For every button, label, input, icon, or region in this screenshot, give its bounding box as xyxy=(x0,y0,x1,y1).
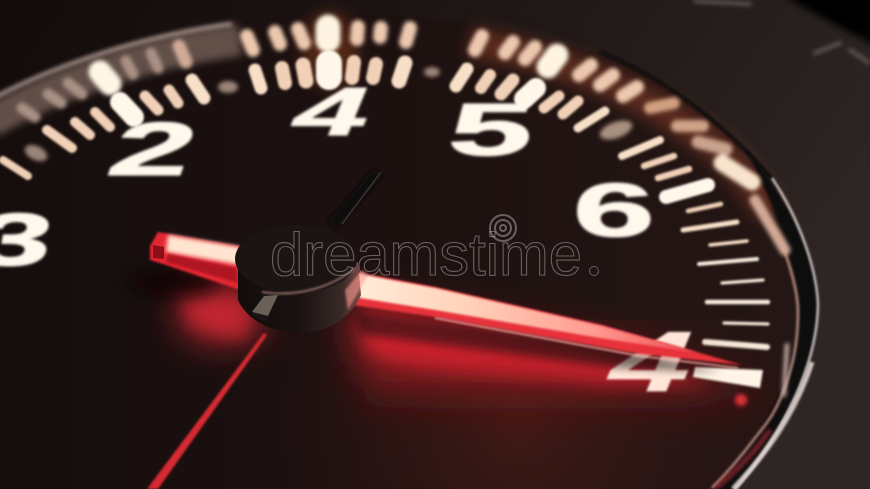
small red reflection spot xyxy=(735,394,747,406)
major tick marks xyxy=(120,63,708,197)
red zone numeral 4 and major tick xyxy=(592,314,763,409)
rear pointer tail xyxy=(130,232,240,296)
numeral 5: 5 xyxy=(444,89,539,171)
upper-left scale band xyxy=(0,24,240,122)
numeral 6: 6 xyxy=(573,167,655,252)
lower numeral 4: 4 xyxy=(592,314,712,409)
red-zone major tick xyxy=(693,367,763,388)
warm rim glow behind upper right ticks xyxy=(470,42,770,215)
lower row of tick marks xyxy=(3,62,768,347)
watermark xyxy=(270,215,598,288)
registered mark xyxy=(590,266,598,276)
warm light on lower dial xyxy=(200,320,780,489)
watermark wordmark: dreamstime xyxy=(270,221,582,288)
dark counterweight needle xyxy=(332,172,381,226)
upper row of tick marks xyxy=(22,27,637,117)
faint outer scale marks xyxy=(695,1,868,62)
centre hub xyxy=(235,225,368,333)
dark top-right corner xyxy=(775,0,870,48)
numeral 4: 4 xyxy=(280,73,385,150)
small scale dots xyxy=(22,67,635,164)
watermark spiral logo xyxy=(490,215,516,241)
main pointer xyxy=(346,270,742,368)
red glow on dial xyxy=(180,286,760,420)
lower red needle reflection xyxy=(147,333,267,489)
bezel highlights xyxy=(650,103,787,395)
warm glow behind centre ticks xyxy=(302,12,358,88)
shadow of main pointer xyxy=(355,312,720,372)
numeral 2: 2 xyxy=(99,107,208,191)
chrome bezel ring xyxy=(600,52,819,489)
numerals xyxy=(0,73,655,281)
